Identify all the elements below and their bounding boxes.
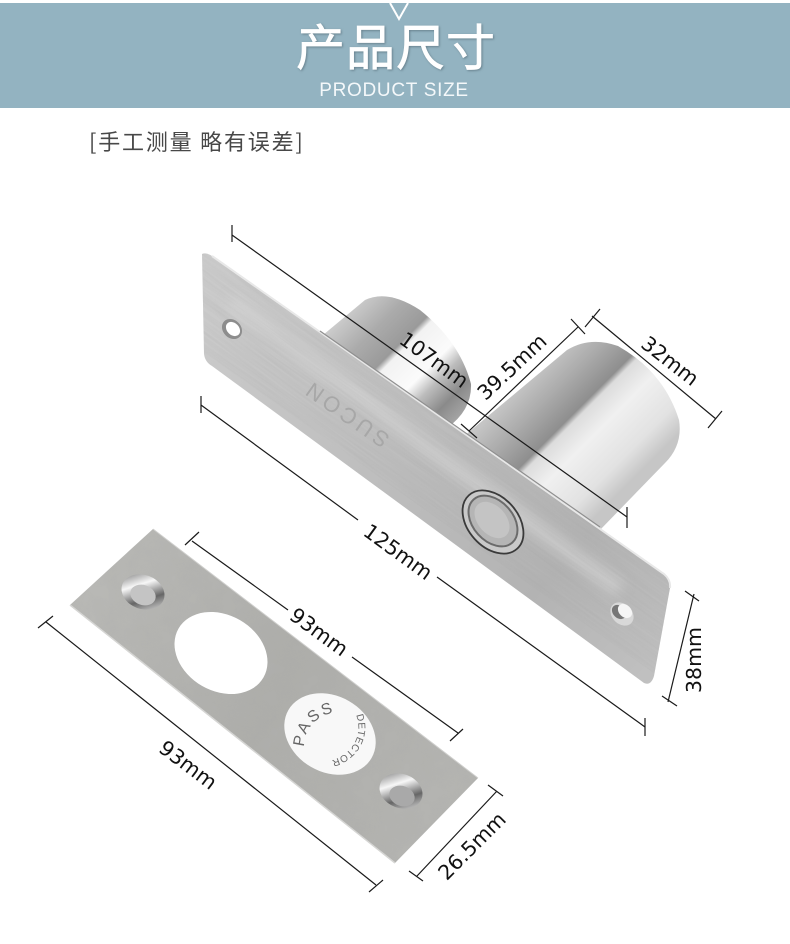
title: 产品尺寸 (296, 9, 496, 80)
push button (450, 479, 536, 565)
dimension: 93mm upper: 93mm (285, 603, 353, 661)
sticker text: DETECTOR: DETECTOR (332, 714, 366, 766)
dimension: 107mm (232, 225, 627, 528)
dimension: 39.5mm: 39.5mm (473, 329, 551, 405)
dimension: 125mm: 125mm (359, 519, 437, 585)
plate body (70, 529, 478, 863)
dimension: 93mm lower (38, 616, 383, 892)
note text: [手工测量 略有误差] (89, 125, 305, 157)
dimension: 107mm: 107mm (395, 327, 473, 393)
countersink top (117, 569, 169, 615)
bolt lock assembly (202, 253, 680, 684)
dimension: 26.5mm: 26.5mm (433, 807, 511, 885)
strike plate (70, 528, 478, 864)
brand emboss: SUCON (298, 375, 394, 453)
dimension: 32mm: 32mm (637, 331, 703, 391)
dimension: 93mm upper (185, 532, 463, 741)
bolt hole (160, 596, 282, 710)
back cylinder (323, 296, 471, 428)
sticker (284, 693, 376, 775)
screw hole left (218, 315, 246, 343)
dimension: 38mm (662, 591, 706, 706)
dimension: 32mm (585, 309, 722, 428)
dimension: 125mm (201, 396, 645, 736)
sticker text: PASS: PASS (293, 702, 332, 746)
dimension: 39.5mm (461, 319, 585, 438)
subtitle: PRODUCT SIZE (319, 80, 469, 101)
countersink bottom (375, 768, 427, 814)
mounting plate (202, 253, 670, 684)
front cylinder (463, 342, 680, 530)
dimension: 93mm lower: 93mm (154, 736, 222, 794)
header banner (0, 3, 790, 108)
icon: chevron (390, 3, 408, 19)
dimension: 26.5mm (409, 785, 511, 885)
screw hole right (606, 598, 638, 630)
dimension: 38mm: 38mm (682, 627, 706, 693)
